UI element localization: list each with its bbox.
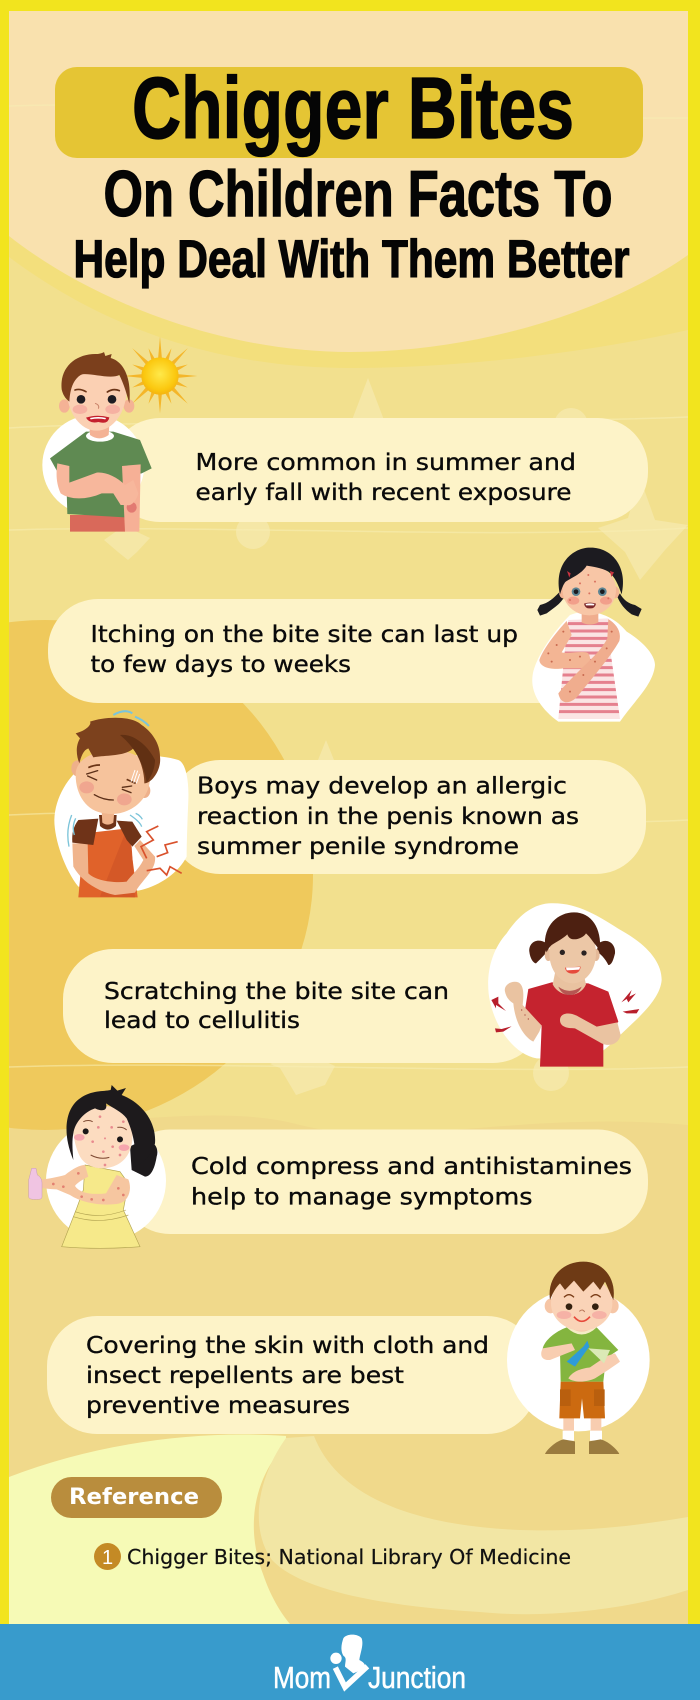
logo: MomJunction [273,1635,466,1695]
reference badge: Reference [69,1485,199,1510]
icon: boy in pain holding stomach [54,711,188,897]
card 6: prevention fact: Covering the skin with cloth and [86,1333,489,1359]
card 1: summer fact [110,418,648,522]
card 3: allergic reaction fact: reaction in the penis known as [197,804,579,830]
icon: boy spraying insect repellent [507,1262,650,1454]
title: Chigger Bites [132,60,574,157]
logo: MomJunction: Mom [273,1660,331,1695]
card 1: summer fact: More common in summer and [196,450,576,476]
card 6: prevention fact [47,1316,537,1434]
card 1: summer fact: early fall with recent exposure [196,480,572,506]
card 6: prevention fact: preventive measures [86,1393,350,1419]
card 2: itching fact: Itching on the bite site can last up [90,622,518,648]
card 2: itching fact [48,599,608,703]
reference entry: 1 [102,1547,113,1569]
card 5: cold compress fact [120,1130,648,1234]
card 3: allergic reaction fact: summer penile syndrome [197,834,519,860]
card 2: itching fact: to few days to weeks [90,652,351,678]
card 6: prevention fact: insect repellents are best [86,1363,404,1389]
card 3: allergic reaction fact: Boys may develop an allergic [197,774,567,800]
title pill [55,67,643,158]
card 4: cellulitis fact: Scratching the bite site can [104,979,449,1005]
icon: girl with pigtails and red shirt [488,903,662,1067]
reference entry: Chigger Bites; National Library Of Medicine [127,1545,571,1569]
card 5: cold compress fact: Cold compress and antihistamines [191,1154,632,1180]
reference badge [51,1477,222,1518]
card 4: cellulitis fact: lead to cellulitis [104,1008,300,1034]
card 3: allergic reaction fact [170,760,646,874]
icon: girl with spots in striped dress [532,548,655,722]
title [74,60,630,289]
card 5: cold compress fact: help to manage symptoms [191,1184,532,1210]
card 4: cellulitis fact [63,949,543,1063]
logo: MomJunction: Junction [368,1660,466,1695]
footer bar [0,1624,700,1700]
icon: boy scratching arm with sun [42,337,197,532]
icon: girl with rash applying lotion [29,1085,166,1248]
